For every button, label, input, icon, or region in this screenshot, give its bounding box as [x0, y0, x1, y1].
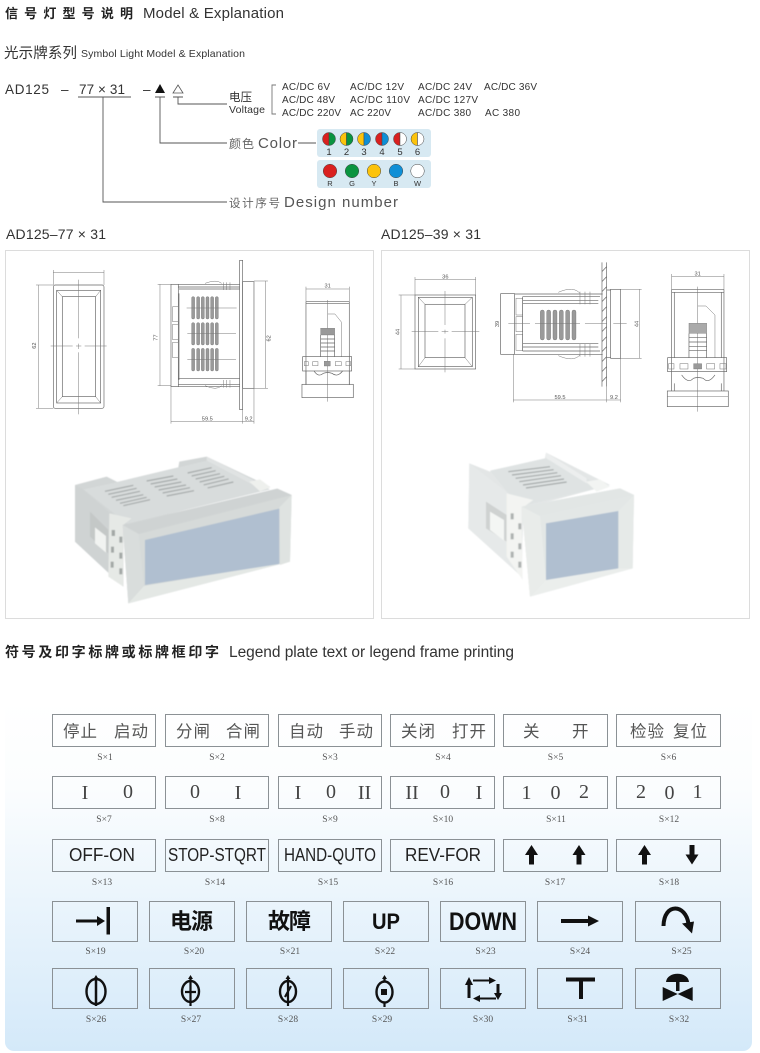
plate codes: S×19 — [85, 947, 106, 957]
icon: open triangle — [173, 85, 183, 93]
swatch numbers: 2 — [344, 147, 349, 158]
plate text: 自动 — [289, 722, 323, 741]
rear and left housing — [468, 453, 610, 577]
plate codes: S×3 — [322, 753, 338, 763]
vent lines — [508, 467, 567, 488]
drawing: AD125-39x31 dimensions — [395, 262, 728, 412]
plate text: 2 — [636, 781, 646, 803]
plate codes: S×20 — [184, 947, 204, 957]
side view: 9.2 — [610, 395, 618, 401]
plate text — [63, 722, 707, 741]
plate codes: S×1 — [97, 753, 113, 763]
plate text: 启动 — [114, 722, 148, 741]
plate codes: S×8 — [209, 815, 225, 825]
plate text: 停止 — [63, 722, 97, 741]
plate text: 关 — [523, 722, 540, 741]
plate codes: S×10 — [433, 815, 453, 825]
legend row 5 — [52, 968, 720, 1025]
box frames — [52, 968, 720, 1008]
plate codes: S×30 — [473, 1015, 493, 1025]
plate codes: S×7 — [96, 815, 112, 825]
latch on side — [90, 512, 108, 553]
screen — [546, 511, 618, 580]
side view: 44 — [634, 321, 640, 327]
plate text: REV-FOR — [405, 845, 481, 865]
heading: AD125-77x31: AD125–77 × 31 — [6, 226, 106, 242]
model code text: 77 × 31 — [79, 82, 125, 97]
front frame — [123, 489, 292, 603]
vent slots — [192, 297, 218, 371]
side view: 77 — [153, 335, 159, 341]
photo: AD125-77x31 product — [75, 457, 292, 603]
legend row 1 — [52, 714, 720, 763]
plate codes: S×24 — [570, 947, 590, 957]
plate codes — [86, 1015, 689, 1025]
voltage options: AC/DC 6V — [282, 82, 330, 93]
plate codes — [92, 878, 679, 888]
side view: 9.2 — [245, 417, 253, 423]
plate codes: S×25 — [671, 947, 692, 957]
swatch numbers — [326, 147, 420, 158]
icon: curved arrow — [664, 908, 694, 934]
voltage options: AC/DC 110V — [350, 95, 410, 106]
heading: model and explanation — [5, 5, 284, 22]
plate text: 复位 — [673, 722, 707, 741]
icon: right arrow — [561, 916, 599, 926]
plate codes: S×18 — [659, 878, 679, 888]
plate text: 0 — [664, 782, 674, 804]
box frames — [52, 776, 720, 808]
panel: AD125-77x31 — [6, 250, 374, 618]
front frame — [522, 488, 634, 597]
plate text: 分闸 — [176, 722, 210, 741]
plate codes: S×21 — [280, 947, 300, 957]
heading: model and explanation: Model & Explanation — [143, 5, 284, 22]
side view: 39 — [495, 321, 501, 327]
plate codes: S×15 — [318, 878, 338, 888]
plate text: I — [476, 782, 482, 804]
voltage options: AC/DC 127V — [418, 95, 478, 106]
plate codes: S×4 — [435, 753, 451, 763]
voltage options: AC/DC 24V — [418, 82, 472, 93]
side view: 62 — [267, 335, 273, 341]
plate text — [82, 781, 702, 804]
voltage options: AC/DC 220V — [282, 108, 341, 119]
rear and left housing — [75, 457, 270, 587]
plate codes: S×2 — [209, 753, 225, 763]
swatch half circles — [322, 132, 424, 146]
plate text: 电源 — [170, 909, 213, 934]
legend row 2 — [52, 776, 720, 825]
voltage options: AC 380 — [485, 108, 520, 119]
latch on side — [486, 502, 507, 542]
colour letters: Y — [371, 179, 377, 188]
front view — [32, 270, 107, 414]
rear view — [667, 271, 728, 412]
color swatch panel: single colour codes — [317, 160, 431, 188]
swatch numbers: 5 — [397, 147, 403, 158]
icon: up and down arrows — [525, 845, 698, 864]
plate text: 检验 — [630, 722, 664, 741]
plate text: HAND-QUTO — [284, 845, 376, 865]
plate text: II — [405, 782, 419, 804]
colour letters: R — [327, 179, 333, 188]
color label: 颜色 — [229, 136, 254, 151]
legend row 4 — [52, 902, 720, 957]
plate codes: S×26 — [86, 1015, 106, 1025]
voltage label: 电压 — [229, 91, 252, 104]
front view: 44 — [395, 329, 401, 335]
model code text: AD125 — [5, 82, 49, 97]
screen — [145, 509, 279, 585]
plate text — [69, 845, 481, 865]
plate text: 0 — [440, 781, 450, 803]
plate text: 开 — [572, 723, 588, 741]
model code text: – — [143, 82, 151, 97]
box frames — [52, 840, 720, 872]
heading: legend plate text — [5, 644, 514, 661]
front view: 36 — [442, 275, 448, 281]
plate codes: S×13 — [92, 878, 112, 888]
rear view — [302, 284, 353, 402]
icon: valve — [663, 974, 693, 1001]
terminal clip — [507, 493, 533, 580]
icon: filled triangle — [155, 84, 165, 93]
terminal clip — [108, 513, 132, 587]
plate text: I — [235, 782, 241, 804]
icon: rotation arrows — [465, 977, 502, 1002]
plate codes: S×17 — [545, 878, 565, 888]
legend row 3 — [52, 840, 720, 888]
color label — [229, 135, 297, 152]
icon: T symbol — [566, 978, 595, 999]
vent lines — [105, 468, 233, 506]
single colour circles — [323, 164, 424, 178]
voltage options: AC 220V — [350, 108, 391, 119]
plate codes — [85, 947, 692, 957]
plate codes: S×6 — [661, 753, 676, 763]
subheading: symbol light series: 光示牌系列 — [4, 45, 77, 62]
model code text — [5, 82, 151, 97]
plate codes: S×27 — [181, 1015, 201, 1025]
plate codes: S×29 — [372, 1015, 392, 1025]
heading: legend plate text: Legend plate text or legend frame printing — [229, 644, 514, 661]
plate codes: S×12 — [659, 815, 679, 825]
plate text: II — [358, 782, 371, 804]
plate codes: S×9 — [322, 815, 338, 825]
panel: AD125-39x31 — [382, 250, 750, 618]
drawing: AD125-77x31 dimensions — [32, 260, 353, 424]
model code text: – — [61, 82, 69, 97]
rear view: 31 — [694, 271, 701, 277]
plate text: 0 — [123, 781, 133, 803]
plate text: UP — [372, 909, 400, 934]
voltage options: AC/DC 36V — [484, 82, 537, 93]
plate text: 故障 — [268, 909, 311, 934]
front view: 62 — [32, 343, 38, 349]
plate text: 0 — [326, 781, 336, 803]
plate text: I — [82, 782, 88, 804]
design number label — [229, 194, 398, 211]
icon: arrow to bar — [76, 907, 110, 934]
plate codes — [96, 815, 679, 825]
voltage label: Voltage — [229, 104, 265, 116]
vent slots — [540, 310, 576, 340]
rear view: 31 — [324, 284, 331, 290]
voltage options: AC/DC 380 — [418, 108, 471, 119]
colour letters: W — [414, 179, 422, 188]
colour letters: G — [349, 179, 355, 188]
plate text: 1 — [522, 782, 532, 804]
plate text: STOP-STQRT — [168, 845, 266, 865]
subheading: symbol light series — [4, 45, 245, 62]
plate text: 手动 — [339, 722, 373, 741]
plate codes: S×16 — [433, 878, 453, 888]
side view: 59.5 — [202, 417, 213, 423]
plate codes: S×31 — [567, 1015, 588, 1025]
plate codes: S×11 — [546, 815, 566, 825]
side view: 59.5 — [554, 395, 565, 401]
plate codes: S×28 — [278, 1015, 298, 1025]
plate text: I — [295, 782, 301, 804]
voltage options: AC/DC 48V — [282, 95, 335, 106]
plate codes: S×32 — [669, 1015, 689, 1025]
plate text: 打开 — [452, 722, 486, 741]
model code diagram — [5, 82, 316, 202]
icon: meter symbols — [86, 975, 392, 1007]
heading: model and explanation: 信号灯型号说明 — [5, 6, 133, 21]
plate text: DOWN — [449, 908, 517, 936]
plate codes — [97, 753, 676, 763]
side view — [495, 262, 642, 402]
background panel: legend gradient — [5, 700, 752, 1051]
photo: AD125-39x31 product — [468, 453, 634, 597]
colour letters — [327, 179, 422, 188]
plate text: OFF-ON — [69, 845, 135, 865]
plate text: 0 — [550, 782, 560, 804]
plate text: 关闭 — [401, 722, 435, 741]
plate text: 合闸 — [226, 722, 260, 741]
design number label: Design number — [284, 194, 398, 211]
color label: Color — [258, 135, 297, 152]
plate text: 0 — [190, 781, 200, 803]
heading: legend plate text: 符号及印字标牌或标牌框印字 — [5, 644, 219, 660]
plate codes: S×5 — [548, 753, 563, 763]
design number label: 设计序号 — [229, 196, 280, 210]
swatch numbers: 3 — [361, 147, 367, 158]
plate codes: S×14 — [205, 878, 225, 888]
subheading: symbol light series: Symbol Light Model & Explanation — [81, 48, 245, 60]
plate text: 1 — [692, 781, 702, 803]
voltage options — [282, 82, 537, 119]
voltage options: AC/DC 12V — [350, 82, 404, 93]
box frames — [52, 714, 720, 746]
plate text: 2 — [579, 781, 589, 803]
swatch numbers: 1 — [326, 147, 332, 158]
plate codes: S×22 — [375, 947, 395, 957]
plate text — [170, 908, 517, 936]
heading: AD125-39x31: AD125–39 × 31 — [381, 226, 481, 242]
swatch numbers: 6 — [415, 147, 420, 158]
connector lines — [78, 85, 316, 202]
plate codes: S×23 — [475, 947, 496, 957]
front view — [395, 275, 479, 372]
color swatch panel: two-colour codes — [317, 129, 431, 158]
voltage label — [229, 91, 265, 116]
colour letters: B — [393, 179, 399, 188]
side view — [153, 260, 273, 424]
box frames — [52, 902, 720, 942]
swatch numbers: 4 — [379, 147, 385, 158]
